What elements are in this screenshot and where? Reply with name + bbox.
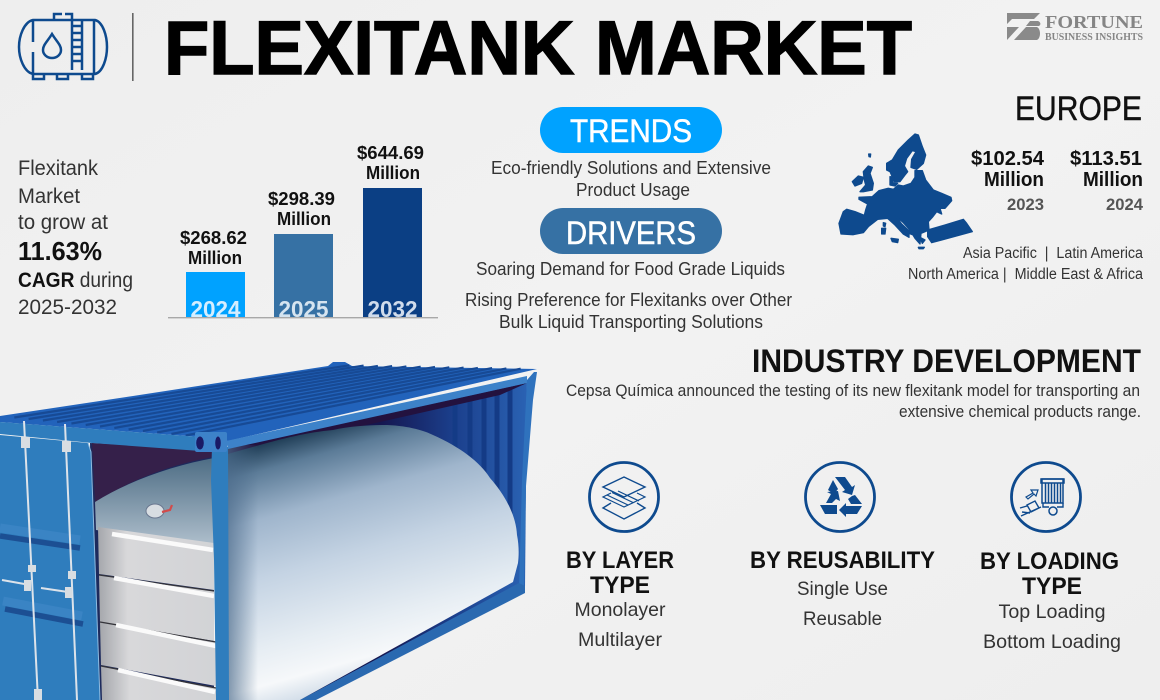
text: industry development description	[566, 382, 1141, 421]
bar 2024: Million	[188, 248, 242, 268]
icon: loading truck	[1012, 462, 1080, 532]
map: Europe	[839, 134, 972, 249]
text: industry development description: Cepsa Química announced the testing of its new flexitank model for transporting an	[566, 382, 1140, 400]
text: trends description	[491, 158, 771, 200]
category: by layer type: Monolayer	[574, 599, 666, 621]
bar 2025	[268, 189, 335, 322]
corner casting	[195, 432, 227, 452]
text: drivers description	[465, 259, 792, 332]
category: by layer type: Multilayer	[578, 629, 663, 651]
stat: Europe 2024: 2024	[1106, 196, 1144, 214]
category: by layer type: TYPE	[590, 572, 650, 599]
text: drivers description: Soaring Demand for Food Grade Liquids	[476, 259, 785, 279]
title: FLEXITANK MARKET	[164, 6, 912, 91]
pill: trends: TRENDS	[570, 113, 692, 149]
icon: recycling	[806, 462, 874, 532]
stat: Europe 2023: Million	[984, 169, 1044, 191]
front top beam	[0, 422, 200, 451]
stat: Europe 2024: Million	[1083, 169, 1143, 191]
icon: storage tank	[19, 14, 107, 79]
category: by reusability	[750, 462, 935, 630]
stat: Europe 2023	[971, 148, 1045, 214]
container inner wall	[228, 378, 527, 700]
roof	[0, 362, 537, 441]
bar 2024: $268.62	[180, 228, 247, 248]
text block: CAGR statement	[18, 157, 133, 319]
text block: CAGR statement: Market	[18, 185, 80, 208]
logo: Fortune Business Insights	[1007, 12, 1143, 43]
pill: trends	[540, 107, 722, 153]
bar 2032: 2032	[368, 296, 418, 322]
stat: Europe 2024: $113.51	[1070, 148, 1142, 170]
pill: drivers	[540, 208, 722, 254]
bar 2032	[357, 143, 424, 322]
category: by reusability: BY REUSABILITY	[750, 547, 935, 574]
logo: Fortune Business Insights: FORTUNE	[1045, 12, 1143, 32]
category: by layer type	[566, 462, 674, 651]
stat: Europe 2023: $102.54	[971, 148, 1045, 170]
flexitank bag	[228, 425, 519, 700]
stat: Europe 2023: 2023	[1007, 196, 1044, 214]
category: by loading type: Top Loading	[998, 601, 1106, 623]
front post	[211, 447, 229, 700]
text: other regions: Asia Pacific | Latin America	[963, 245, 1143, 262]
logo: Fortune Business Insights: BUSINESS INSIGHTS	[1045, 32, 1143, 43]
text: industry development description: extensive chemical products range.	[899, 403, 1141, 421]
category: by loading type: Bottom Loading	[983, 631, 1121, 653]
header divider	[132, 13, 134, 81]
text block: CAGR statement: CAGR during	[18, 269, 133, 292]
heading: Europe: EUROPE	[1015, 90, 1142, 128]
category: by loading type: TYPE	[1022, 573, 1082, 600]
bar 2025: $298.39	[268, 189, 335, 209]
category: by reusability: Reusable	[803, 608, 882, 630]
text: drivers description: Bulk Liquid Transporting Solutions	[499, 312, 763, 332]
text block: CAGR statement: 2025-2032	[18, 296, 117, 319]
text: trends description: Eco-friendly Solutions and Extensive	[491, 158, 771, 178]
category: by reusability: Single Use	[797, 578, 888, 600]
illustration: container with flexitank	[0, 362, 537, 700]
door	[0, 421, 100, 700]
pallet panels	[98, 527, 216, 700]
text: drivers description: Rising Preference for Flexitanks over Other	[465, 290, 792, 310]
category: by loading type: BY LOADING	[980, 548, 1119, 575]
right top beam	[226, 376, 527, 449]
valve	[146, 504, 172, 518]
pill: drivers: DRIVERS	[566, 215, 696, 251]
bar 2025: Million	[277, 209, 331, 229]
bottom rail	[300, 583, 525, 700]
bar 2032: $644.69	[357, 143, 424, 163]
heading: industry development: INDUSTRY DEVELOPMENT	[752, 343, 1141, 379]
stat: Europe 2024	[1070, 148, 1144, 214]
bar chart: market size	[168, 143, 438, 322]
bar 2025: 2025	[278, 296, 329, 322]
text block: CAGR statement: 11.63%	[18, 236, 102, 266]
bar 2032: Million	[366, 163, 420, 183]
text: other regions	[908, 245, 1143, 283]
icon: layers	[590, 462, 658, 532]
category: by loading type	[980, 462, 1121, 653]
category: by layer type: BY LAYER	[566, 547, 674, 574]
bar 2024: 2024	[190, 296, 241, 322]
bar 2024	[180, 228, 247, 322]
text: trends description: Product Usage	[576, 180, 690, 200]
text block: CAGR statement: to grow at	[18, 211, 108, 234]
right post	[519, 372, 537, 590]
text: other regions: North America | Middle East & Africa	[908, 266, 1143, 283]
text block: CAGR statement: Flexitank	[18, 157, 98, 180]
